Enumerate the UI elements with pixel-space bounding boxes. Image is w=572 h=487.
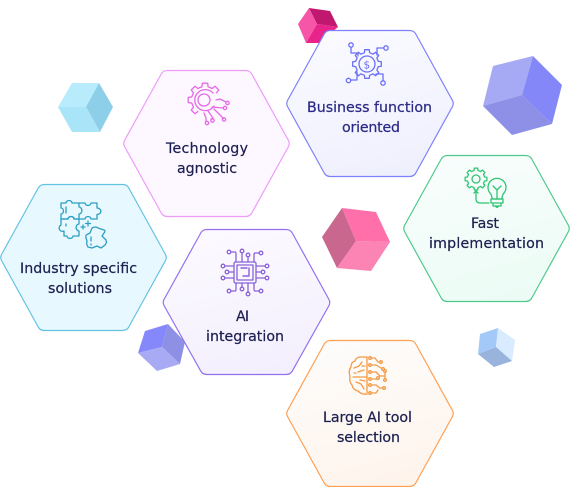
label xyxy=(20,261,137,297)
panel: industry specific solutions xyxy=(1,184,166,330)
label xyxy=(165,141,248,177)
label: agnostic xyxy=(177,161,237,177)
label xyxy=(323,410,412,446)
label: selection xyxy=(337,430,400,446)
icon: puzzle pieces xyxy=(59,201,106,248)
label: solutions xyxy=(48,281,112,297)
icon: dollar gear xyxy=(346,43,388,85)
icon: gear and bulb xyxy=(465,168,506,208)
label: Industry specific xyxy=(20,261,137,277)
panel: large AI tool selection xyxy=(287,340,453,486)
label xyxy=(307,100,432,136)
icon: gear with circuit xyxy=(188,83,229,125)
label xyxy=(429,216,544,252)
cube: cyan left xyxy=(58,83,113,132)
label: Large AI tool xyxy=(323,410,412,426)
label: integration xyxy=(206,329,284,345)
cube: pale blue right xyxy=(478,328,515,367)
label: Technology xyxy=(165,141,248,157)
panel: fast implementation xyxy=(404,156,569,302)
panel: technology agnostic xyxy=(124,70,289,216)
cube: periwinkle right xyxy=(483,56,562,135)
icon: chip xyxy=(221,249,269,296)
label: AI xyxy=(236,309,249,325)
label: Business function xyxy=(307,100,432,116)
label: implementation xyxy=(429,236,544,252)
cube: periwinkle lower xyxy=(138,324,185,371)
label: Fast xyxy=(471,216,499,232)
label: oriented xyxy=(342,120,400,136)
cube: magenta top xyxy=(298,8,338,43)
panel: AI integration xyxy=(163,230,330,374)
panel: business function oriented xyxy=(287,30,453,176)
label xyxy=(206,309,284,345)
icon glyph: dollar: $ xyxy=(364,60,370,72)
icon: brain circuit xyxy=(349,357,386,394)
cube: pink centre xyxy=(322,208,390,271)
